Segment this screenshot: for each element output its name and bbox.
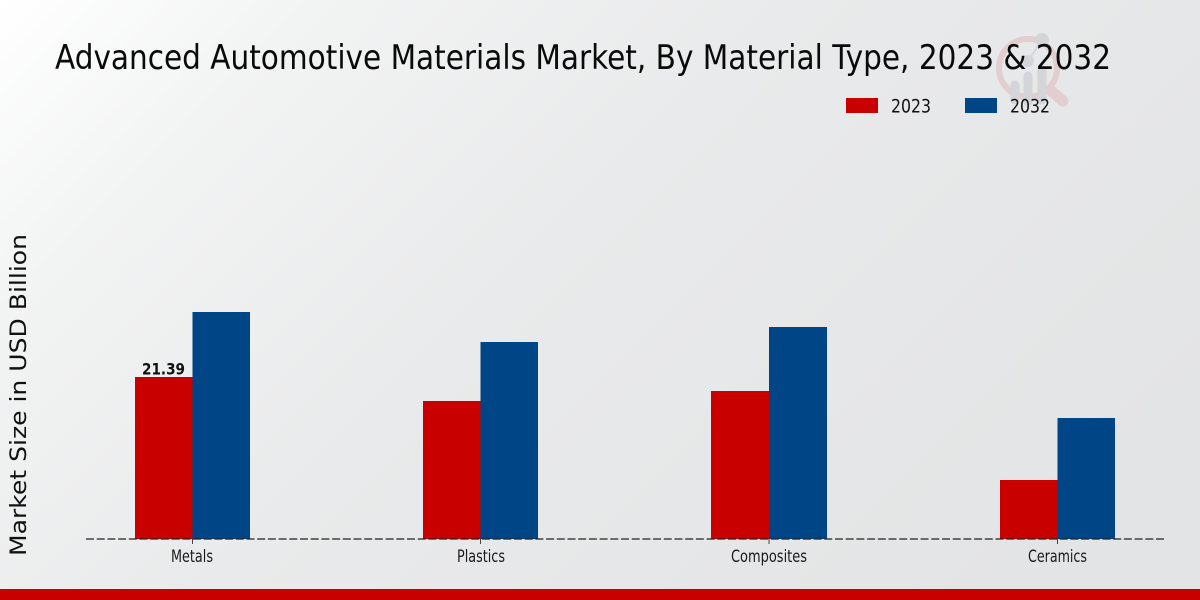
bars: Metals [135,312,250,539]
footer bar [0,589,1200,600]
x-axis baseline [86,538,1164,540]
x-axis ticks [192,539,1058,544]
bar chart [86,312,1164,566]
y-axis title: Market Size in USD Billion [6,234,32,556]
bars: Plastics [423,342,538,539]
legend item: 2032 [965,96,1050,118]
x-axis labels: Metals [171,547,213,566]
icon: watermark logo [999,33,1063,102]
data label: 21.39: 21.39 [142,360,185,378]
x-axis labels: Ceramics [1028,547,1087,566]
legend item: 2023: 2023 [891,96,931,118]
legend [846,96,1050,118]
x-axis labels [171,547,1087,566]
legend item: 2032: 2032 [1010,96,1050,118]
legend item: 2023 [846,96,931,118]
bars: Ceramics [1000,418,1115,539]
x-axis labels: Composites [731,547,807,566]
x-axis labels: Plastics [457,547,505,566]
bars: Composites [711,327,827,539]
